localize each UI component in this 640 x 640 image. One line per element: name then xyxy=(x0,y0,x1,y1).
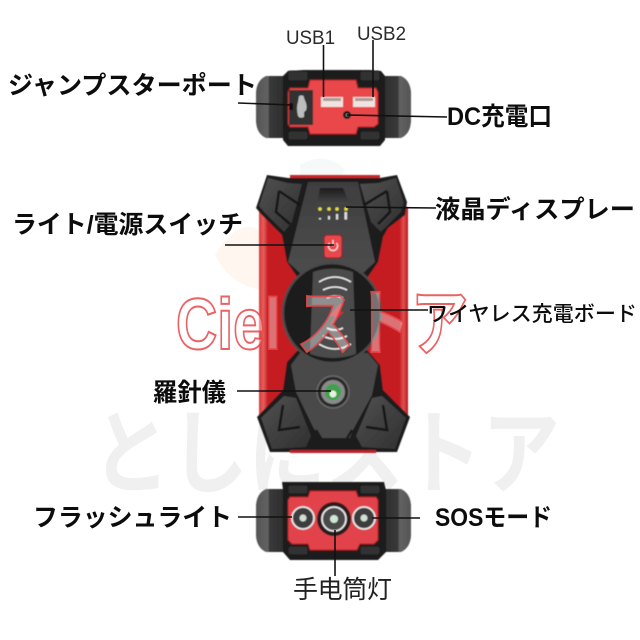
left grip xyxy=(256,76,285,138)
right grip xyxy=(383,489,411,552)
bottom ridges xyxy=(279,405,387,430)
centre flashlight LED xyxy=(317,502,351,536)
LCD indicator lights xyxy=(318,207,348,220)
LCD recess xyxy=(317,188,350,204)
right LED xyxy=(353,507,375,529)
watermark: としにストア: としにストア xyxy=(92,404,560,506)
label: LCD display: 液晶ディスプレー xyxy=(435,195,635,224)
centre housing xyxy=(283,70,385,146)
DC port xyxy=(343,111,351,119)
clips xyxy=(288,485,380,555)
label: USB2: USB2 xyxy=(357,24,406,45)
leader lines xyxy=(225,40,447,576)
device: bottom end view xyxy=(256,482,411,560)
label: jump starter port: ジャンプスターポート xyxy=(8,72,257,100)
label: wireless charging board: ワイヤレス充電ボード xyxy=(427,303,637,326)
red shell xyxy=(259,207,408,419)
device: main body xyxy=(256,175,410,453)
label: SOS mode: SOSモード xyxy=(435,504,552,532)
watermark: Ciel ストア: Ciel ストア xyxy=(176,285,468,365)
faint logo behind device xyxy=(215,159,345,290)
wireless charging pad xyxy=(283,263,381,363)
left LED xyxy=(292,507,314,529)
top right shoulder xyxy=(360,178,404,232)
label: torch lamp: 手电筒灯 xyxy=(293,576,392,604)
central upper face xyxy=(288,182,375,273)
label: light / power switch: ライト/電源スイッチ xyxy=(12,211,243,239)
label: compass: 羅針儀 xyxy=(153,379,226,407)
red panel xyxy=(288,491,378,550)
bottom right shoulder xyxy=(356,396,406,449)
right grip xyxy=(383,76,411,138)
red panel xyxy=(288,80,378,134)
top left shoulder xyxy=(259,178,302,232)
lower central face xyxy=(291,353,378,438)
clips xyxy=(288,71,380,140)
bottom red edge xyxy=(290,450,376,453)
label: USB1: USB1 xyxy=(286,28,335,49)
power switch xyxy=(324,235,342,258)
bottom left shoulder xyxy=(261,396,311,449)
centre housing xyxy=(282,482,386,560)
black body silhouette xyxy=(256,175,410,452)
compass xyxy=(317,376,349,408)
top red strip xyxy=(290,175,380,181)
label: flashlight: フラッシュライト xyxy=(33,504,232,532)
USB1 port xyxy=(321,97,343,107)
label: DC charging port: DC充電口 xyxy=(447,103,552,131)
device: top end view xyxy=(256,70,411,146)
left grip xyxy=(256,489,285,552)
jump starter port xyxy=(289,90,313,125)
USB2 port xyxy=(353,97,375,107)
top shoulder ridges xyxy=(276,191,390,224)
